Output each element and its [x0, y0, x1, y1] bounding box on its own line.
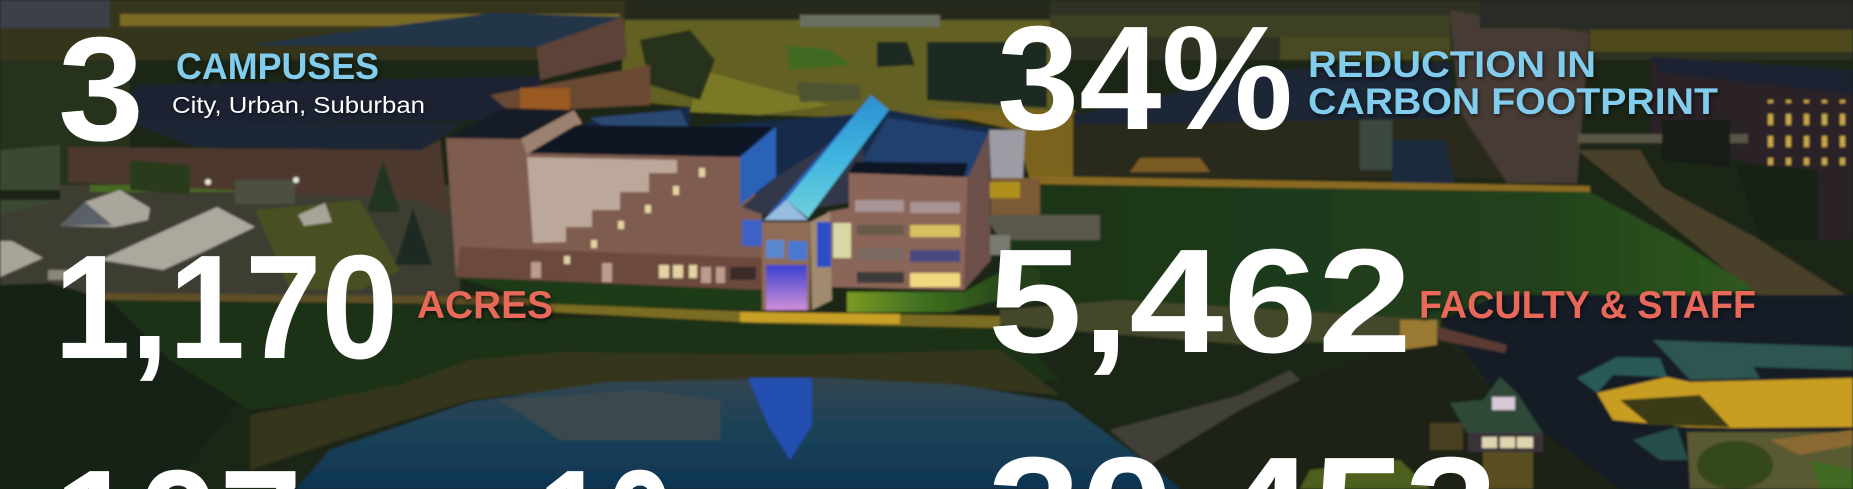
wing windows — [855, 200, 904, 212]
number 1,170: 1,170 — [54, 225, 398, 390]
second roof — [124, 76, 540, 122]
right buildings with lit windows — [1651, 57, 1853, 180]
parking and tents — [235, 180, 295, 204]
label reduction — [1308, 44, 1718, 122]
right wing — [827, 173, 968, 290]
pond — [296, 378, 1182, 489]
label reduction: CARBON FOOTPRINT — [1308, 81, 1718, 122]
orange walk — [1030, 176, 1590, 194]
lower right complex — [1441, 295, 1853, 489]
left grounds — [0, 60, 130, 190]
lit lawn and path — [456, 277, 762, 310]
stat: 34% carbon reduction — [997, 0, 1718, 161]
label faculty: FACULTY & STAFF — [1419, 284, 1756, 327]
tan annex — [985, 215, 1100, 240]
right rear roof — [863, 118, 989, 180]
number 34%: 34% — [997, 0, 1293, 161]
stepped light wall — [527, 157, 677, 243]
main roof — [529, 125, 772, 157]
path lower — [1000, 300, 1440, 345]
number 5,462: 5,462 — [988, 219, 1412, 384]
rear east wall — [989, 130, 1025, 178]
right grounds — [1050, 0, 1853, 60]
green lawn — [1002, 184, 1755, 345]
label reduction: REDUCTION IN — [1308, 44, 1596, 85]
rear building roof — [249, 13, 623, 47]
blue glass side — [740, 127, 776, 205]
third roof — [124, 120, 463, 150]
low wall — [68, 140, 448, 215]
reflection — [500, 378, 812, 460]
sublabel: City, Urban, Suburban — [172, 92, 425, 118]
hedge — [250, 350, 1060, 470]
tower — [1450, 10, 1589, 183]
left trees — [0, 283, 550, 489]
field trees and lawn — [787, 45, 850, 70]
stat: 3 campuses — [58, 7, 425, 172]
road — [1577, 150, 1853, 300]
rear roofs — [586, 107, 1000, 200]
upper centre field — [620, 20, 1053, 120]
yellow building and teal roofs — [1597, 377, 1853, 428]
stat: 5,462 faculty and staff — [988, 219, 1756, 384]
lawn — [300, 316, 1060, 400]
right top rows — [1480, 0, 1853, 28]
entrance — [762, 222, 810, 310]
walk — [100, 293, 560, 305]
wall windows — [564, 168, 705, 278]
right mid building block — [1073, 100, 1507, 178]
label campuses: CAMPUSES — [176, 46, 379, 87]
tower top — [446, 108, 574, 139]
stat: 1,170 acres — [54, 225, 553, 390]
main wall — [446, 138, 762, 290]
top strip: lit grounds — [0, 0, 1853, 60]
small house — [1450, 377, 1543, 433]
number 3: 3 — [58, 7, 144, 172]
label acres: ACRES — [417, 284, 553, 327]
skylight — [786, 95, 889, 218]
